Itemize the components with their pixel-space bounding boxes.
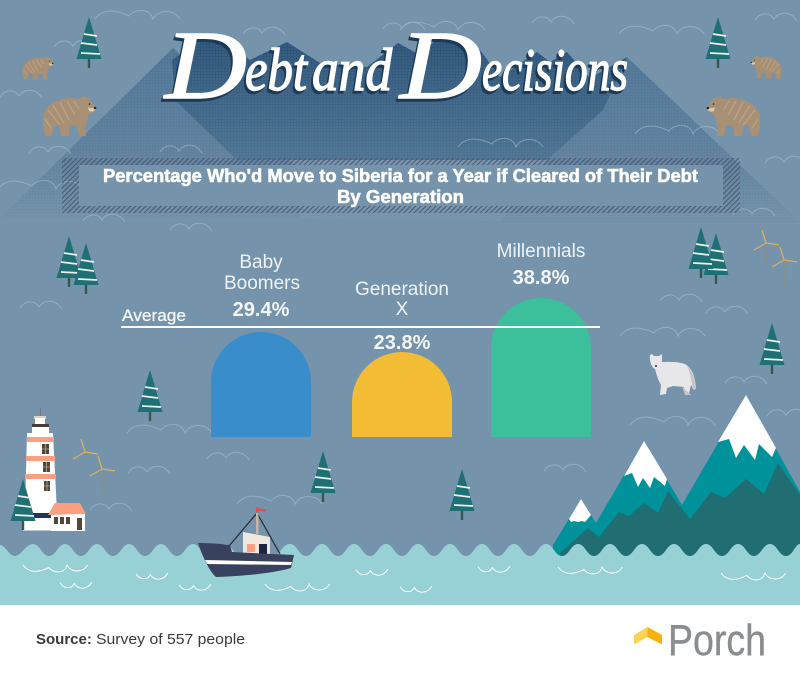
snowy mountains: [553, 395, 800, 560]
title: D: [398, 12, 482, 120]
bar: Generation X: [352, 279, 452, 437]
bar: Millennials: [491, 241, 591, 437]
subtitle banner: By Generation: [337, 187, 464, 207]
average line: Average: [122, 306, 186, 325]
source line: Source:: [36, 631, 92, 648]
title: D: [163, 12, 247, 120]
bar: Millennials: 38.8%: [513, 267, 570, 289]
snow caps: [569, 395, 776, 522]
bar: Generation X: X: [396, 299, 409, 320]
bar: Generation X: 23.8%: [374, 332, 431, 354]
bar: Generation X: Generation: [355, 279, 449, 300]
fishing boat: [198, 507, 294, 577]
title: [163, 12, 628, 120]
bear right large: [707, 96, 760, 136]
title: and: [312, 37, 393, 103]
wind turbines: [73, 230, 797, 494]
sea waves: [0, 544, 800, 605]
bar chart: generations: [121, 241, 600, 437]
bar: Baby Boomers: Boomers: [224, 273, 300, 294]
Porch logo: [634, 616, 766, 665]
title: ebt: [245, 37, 308, 103]
lighthouse: [10, 408, 86, 531]
subtitle banner: [62, 158, 740, 213]
footer: [0, 605, 800, 674]
keeper's house: [48, 503, 86, 531]
Porch logo: Porch: [668, 616, 766, 665]
icon: white wolf: [650, 354, 696, 395]
title: ecisions: [482, 37, 628, 103]
source line: [36, 631, 245, 648]
bear top left small: [22, 57, 53, 80]
source line: Survey of 557 people: [96, 631, 245, 648]
bar: Baby Boomers: Baby: [239, 252, 283, 273]
bar: Millennials: Millennials: [497, 241, 585, 262]
lighthouse tree: [10, 479, 36, 530]
subtitle banner: Percentage Who'd Move to Siberia for a Year if Cleared of Their Debt: [103, 166, 698, 186]
mountain base: [553, 395, 800, 560]
bear top right small: [751, 56, 782, 79]
bar: Baby Boomers: 29.4%: [233, 299, 290, 321]
bar: Baby Boomers: [211, 252, 311, 437]
mountain shadow: [560, 463, 800, 560]
sky clouds: [0, 10, 800, 511]
trees: [56, 17, 784, 520]
background mountains behind title: [0, 33, 800, 222]
bear left large: [43, 96, 96, 136]
